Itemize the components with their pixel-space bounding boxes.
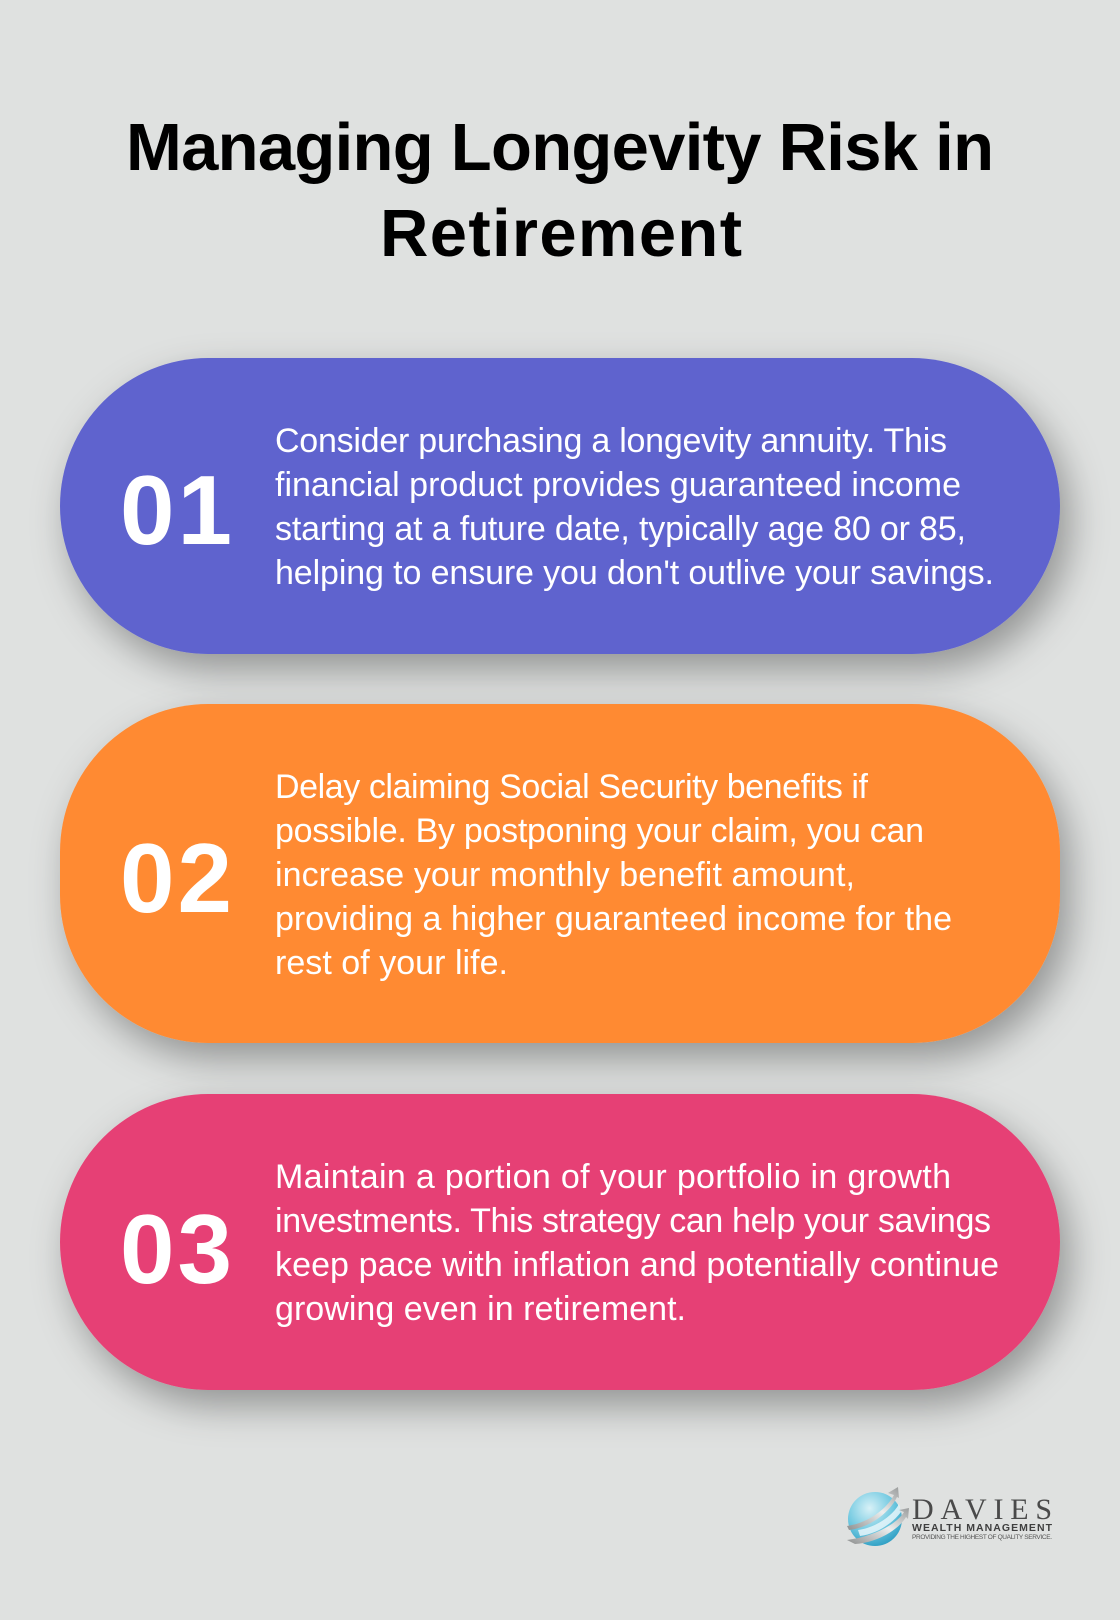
text block 01: financial product provides guaranteed income xyxy=(275,466,961,504)
text block 03: investments. This strategy can help your savings xyxy=(275,1202,991,1240)
card 01 background xyxy=(60,358,1060,654)
text block 01 xyxy=(275,422,994,592)
wordmark xyxy=(912,1493,1053,1541)
title xyxy=(126,110,994,271)
text block 02: providing a higher guaranteed income for the xyxy=(275,900,952,938)
text block 02: Delay claiming Social Security benefits if xyxy=(275,768,869,806)
wordmark: DAVIES xyxy=(912,1493,1052,1526)
wordmark: WEALTH MANAGEMENT xyxy=(912,1522,1053,1534)
text block 01: starting at a future date, typically age 80 or 85, xyxy=(275,510,966,548)
text block 03: growing even in retirement. xyxy=(275,1290,686,1328)
text block 01: Consider purchasing a longevity annuity. This xyxy=(275,422,947,460)
text block 03: Maintain a portion of your portfolio in growth xyxy=(275,1158,951,1196)
text block 02: increase your monthly benefit amount, xyxy=(275,856,855,894)
text block 02 xyxy=(275,768,952,982)
text block 03: keep pace with inflation and potentially continue xyxy=(275,1246,999,1284)
panel: step 02 xyxy=(60,704,1060,1043)
wordmark: PROVIDING THE HIGHEST OF QUALITY SERVICE. xyxy=(912,1534,1052,1541)
title: Managing Longevity Risk in xyxy=(126,110,994,185)
panel: step 01 xyxy=(60,358,1060,654)
text block 03 xyxy=(275,1158,999,1328)
number 02: 02 xyxy=(120,823,235,933)
number 03: 03 xyxy=(120,1194,235,1304)
panel: step 03 xyxy=(60,1094,1060,1390)
card 02 background xyxy=(60,704,1060,1043)
text block 02: possible. By postponing your claim, you can xyxy=(275,812,924,850)
icon: globe with arrows xyxy=(847,1487,909,1546)
text block 02: rest of your life. xyxy=(275,944,508,982)
number 01: 01 xyxy=(120,455,235,565)
card 03 background xyxy=(60,1094,1060,1390)
text block 01: helping to ensure you don't outlive your savings. xyxy=(275,554,994,592)
title: Retirement xyxy=(380,196,742,271)
logo: Davies Wealth Management xyxy=(847,1487,1053,1546)
